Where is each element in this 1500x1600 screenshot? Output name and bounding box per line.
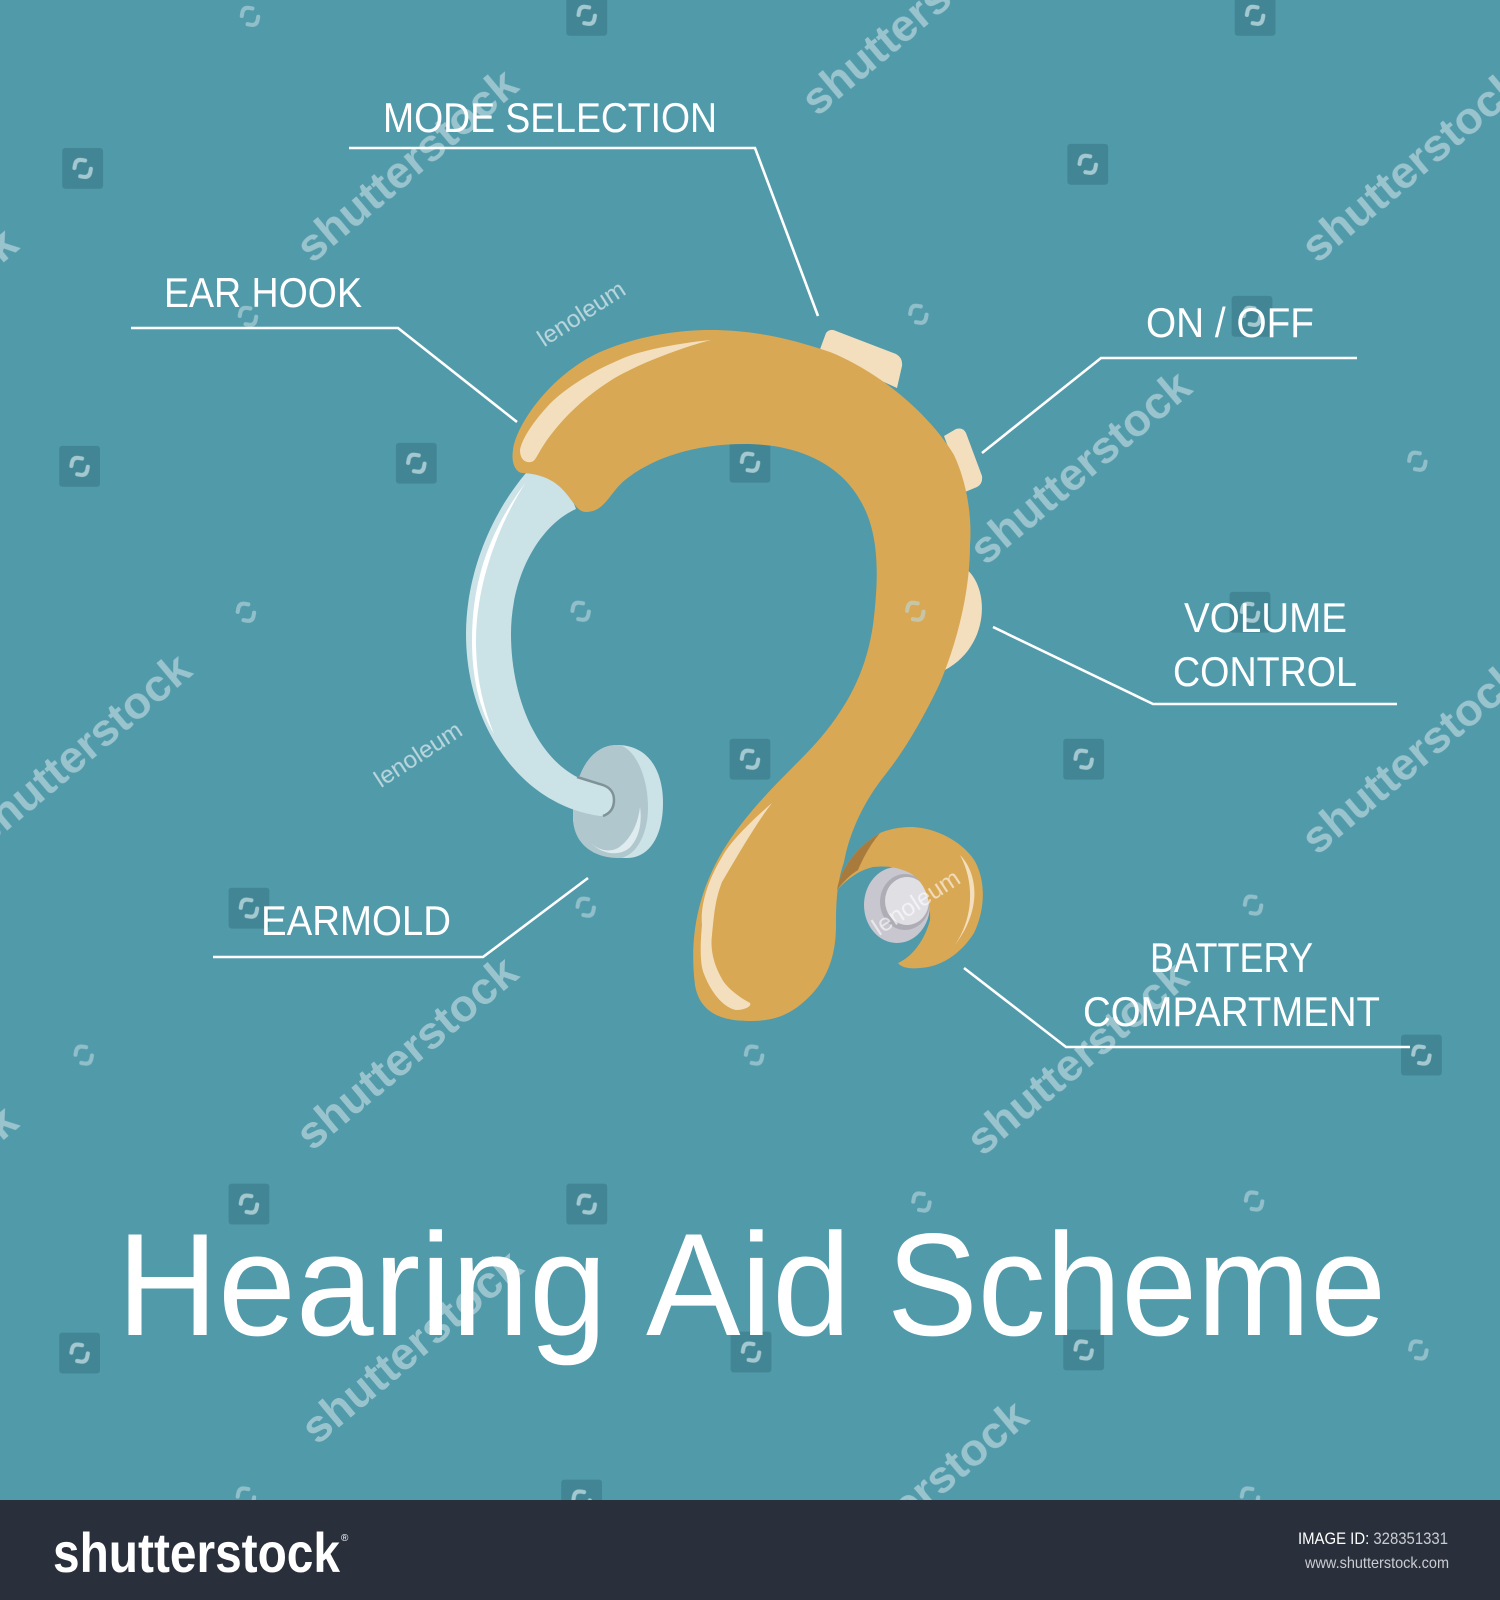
- shutterstock wordmarks: shutterstock: [286, 945, 527, 1160]
- earmold: [573, 745, 663, 858]
- website: www.shutterstock.com: [1304, 1555, 1449, 1572]
- ear hook tube: [466, 473, 614, 816]
- button: on off: [944, 428, 982, 492]
- icon over dial: [906, 602, 925, 621]
- label: on / off: ON / OFF: [1146, 299, 1314, 346]
- title: Hearing: [117, 1203, 607, 1366]
- battery compartment curl: [837, 827, 983, 968]
- label: volume control: CONTROL: [1173, 648, 1357, 695]
- registered mark: ®: [341, 1533, 349, 1544]
- shutterstock wordmarks: shutterstock: [959, 360, 1201, 574]
- title: [117, 1203, 1386, 1366]
- battery: [864, 867, 930, 943]
- label: ear hook: [131, 269, 517, 422]
- lenoleum marks: lenoleum: [533, 276, 631, 352]
- label: volume control: VOLUME: [1184, 594, 1347, 641]
- label: battery compartment: COMPARTMENT: [1083, 988, 1380, 1035]
- title: Scheme: [887, 1203, 1386, 1366]
- tube highlight: [472, 482, 526, 734]
- lenoleum marks: lenoleum: [369, 717, 467, 793]
- body of the hearing aid: [512, 330, 970, 1021]
- title: Aid: [646, 1203, 851, 1366]
- shutterstock wordmarks: shutterstock: [291, 1239, 532, 1453]
- lenoleum marks: lenoleum: [867, 865, 965, 941]
- button: mode selection: [819, 330, 902, 388]
- label: earmold: [213, 878, 588, 957]
- label: volume control: [993, 594, 1397, 704]
- shutterstock wordmarks: shutterstock: [956, 950, 1198, 1165]
- shutterstock wordmarks: shutterstock: [286, 58, 527, 272]
- footer bar: [0, 1500, 1500, 1600]
- tube end shadow: [577, 777, 614, 816]
- shutterstock wordmarks: shutterstock: [796, 1389, 1037, 1600]
- hearing aid illustration: [466, 330, 983, 1021]
- lenoleum marks: [369, 276, 965, 941]
- ear hook and earmold: [466, 473, 663, 858]
- dial: volume control: [930, 566, 982, 670]
- label: earmold: EARMOLD: [261, 897, 451, 944]
- label: battery compartment: BATTERY: [1150, 934, 1313, 981]
- footer logo: shutterstock: [53, 1521, 341, 1584]
- body highlights: [520, 340, 711, 462]
- image id: IMAGE ID: 328351331: [1298, 1529, 1448, 1548]
- label: battery compartment: [964, 934, 1410, 1047]
- label: mode selection: MODE SELECTION: [383, 94, 717, 141]
- label: mode selection: [349, 94, 818, 316]
- label: ear hook: EAR HOOK: [164, 269, 362, 316]
- label: on / off: [982, 299, 1357, 453]
